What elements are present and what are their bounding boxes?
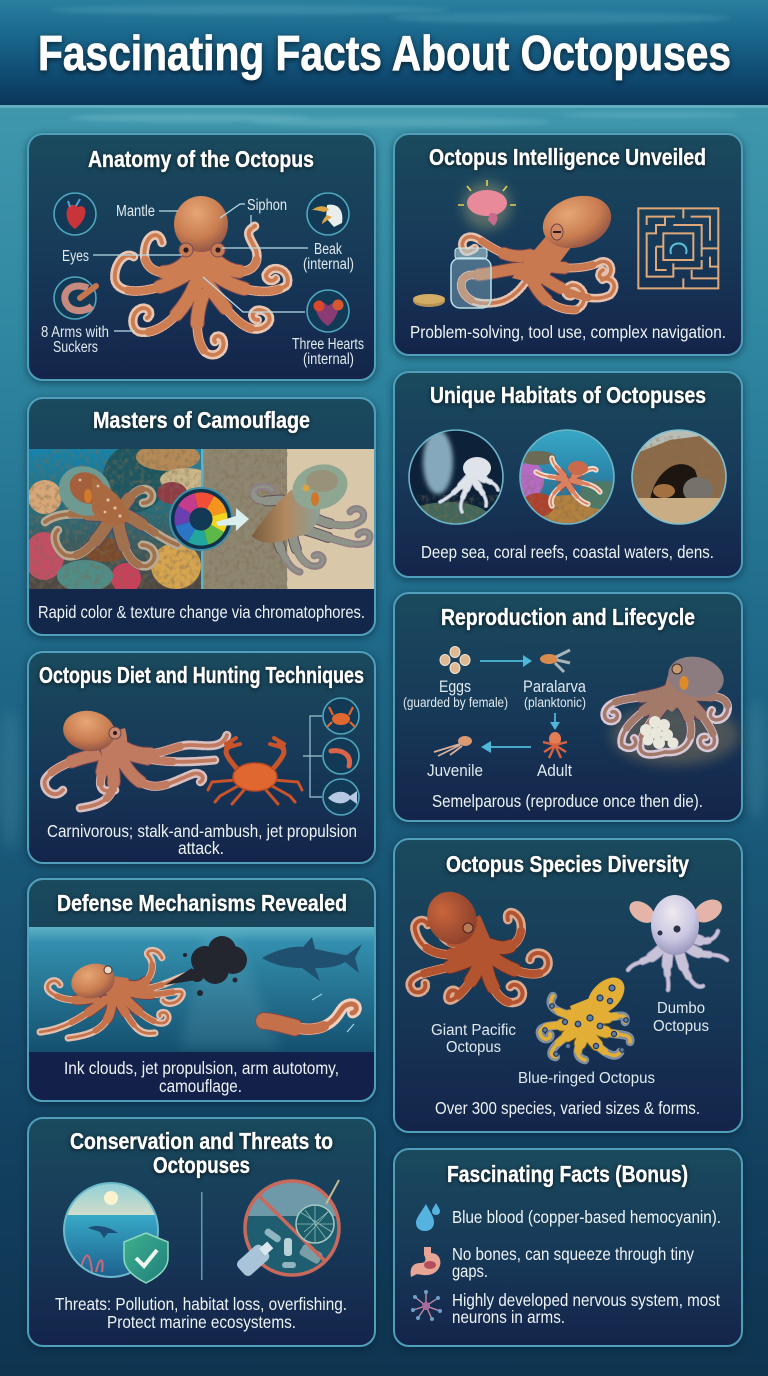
- icon: suckers: [54, 277, 96, 319]
- label: beak: [303, 241, 354, 273]
- prey bracket: [303, 716, 322, 797]
- octopus stalking illustration: [45, 707, 227, 808]
- caption: [47, 821, 357, 858]
- heading: species: Octopus Species Diversity: [446, 851, 689, 877]
- panel edge: [28, 879, 375, 1101]
- label: paralarva: (planktonic): [524, 695, 586, 710]
- icon: stomach: [411, 1247, 440, 1277]
- jar with lid: [413, 248, 491, 308]
- caption: [64, 1058, 339, 1096]
- heading: intelligence: Octopus Intelligence Unveiled: [429, 144, 706, 170]
- ink cloud: [165, 936, 247, 996]
- heading: camouflage: Masters of Camouflage: [93, 407, 310, 433]
- image: coral reef side with octopus: [29, 449, 201, 589]
- caption: Protect marine ecosystems.: [107, 1312, 296, 1332]
- illustration: giant pacific octopus: [410, 883, 548, 1003]
- label: arms: Suckers: [53, 339, 98, 356]
- underwater scene: [28, 927, 374, 1052]
- caption: [55, 1294, 347, 1332]
- panel: defense mechanisms: [28, 879, 375, 1101]
- octopus anatomy illustration: [115, 196, 288, 355]
- heading: conservation: [70, 1128, 333, 1178]
- divider: [201, 1192, 202, 1280]
- label: eggs: [403, 677, 508, 710]
- caption band: [28, 1052, 375, 1101]
- caption band: [28, 589, 375, 635]
- panel: species diversity: [394, 839, 742, 1132]
- panel: conservation and threats: [28, 1118, 375, 1346]
- caption: Ink clouds, jet propulsion, arm autotomy,: [64, 1058, 339, 1078]
- icon: three hearts: [307, 290, 349, 332]
- label: giant pacific: [431, 1022, 516, 1056]
- icon: shrimp prey: [323, 738, 359, 774]
- heading: conservation: Octopuses: [153, 1152, 250, 1178]
- image: sandy seabed side with octopus: [203, 449, 374, 589]
- maze: [638, 208, 718, 288]
- leader lines: [93, 204, 308, 331]
- fact: no bones: No bones, can squeeze through tiny: [452, 1244, 694, 1264]
- caption: Problem-solving, tool use, complex navigation.: [410, 322, 726, 342]
- fact: nervous system: neurons in arms.: [452, 1307, 565, 1327]
- icon: juvenile: [434, 736, 472, 756]
- panel: reproduction and lifecycle: [394, 593, 742, 821]
- icon: colour wheel with arrow: [170, 488, 249, 550]
- fact: nervous system: Highly developed nervous system, most: [452, 1290, 720, 1310]
- icon: water drops: [416, 1203, 440, 1231]
- icon: heart: [54, 193, 96, 235]
- image: coral reef: [519, 429, 615, 525]
- shark silhouette: [262, 937, 362, 981]
- fact: blue blood: Blue blood (copper-based hemocyanin).: [452, 1207, 721, 1227]
- label: eggs: Eggs: [439, 677, 471, 696]
- divider between the two scenes: [201, 449, 204, 589]
- icon: ocean threats: [235, 1180, 339, 1278]
- label: eggs: (guarded by female): [403, 695, 508, 710]
- heading: defense: Defense Mechanisms Revealed: [57, 890, 347, 916]
- image: coastal den: [632, 429, 728, 528]
- label: arms: 8 Arms with: [41, 324, 109, 341]
- icon: protected ocean: [62, 1182, 168, 1283]
- panel: fascinating facts bonus: [394, 1149, 742, 1346]
- label: juvenile: Juvenile: [427, 761, 483, 780]
- label: beak: (internal): [303, 256, 354, 273]
- header banner: [0, 0, 768, 108]
- label: dumbo: Octopus: [653, 1018, 709, 1035]
- caption: Semelparous (reproduce once then die).: [432, 791, 703, 811]
- label: eyes: Eyes: [62, 248, 89, 265]
- illustration: dumbo octopus: [625, 895, 727, 990]
- label: giant pacific: Giant Pacific: [431, 1022, 516, 1039]
- heading: habitats: Unique Habitats of Octopuses: [430, 382, 706, 408]
- icon: paralarva: [540, 650, 570, 672]
- caption: Deep sea, coral reefs, coastal waters, dens.: [421, 542, 714, 562]
- label: siphon: Siphon: [247, 197, 287, 214]
- caption: Rapid color & texture change via chromatophores.: [38, 602, 365, 622]
- label: adult: Adult: [537, 761, 572, 780]
- fact: no bones: [452, 1244, 694, 1281]
- label: giant pacific: Octopus: [446, 1039, 501, 1056]
- heading: bonus: Fascinating Facts (Bonus): [447, 1161, 688, 1187]
- heading: reproduction: Reproduction and Lifecycle: [441, 604, 695, 630]
- panel: diet and hunting: [28, 652, 375, 863]
- illustration: blue-ringed octopus: [540, 971, 631, 1060]
- label: beak: Beak: [314, 241, 342, 258]
- heading: conservation: Conservation and Threats to: [70, 1128, 333, 1154]
- octopus escaping illustration: [40, 950, 188, 1038]
- caption: camouflage.: [159, 1076, 242, 1096]
- arrow: paralarva to adult: [550, 713, 560, 730]
- fact: no bones: gaps.: [452, 1261, 488, 1281]
- image: deep sea vent: [408, 429, 504, 525]
- label: arms: [41, 324, 109, 356]
- heading: anatomy: Anatomy of the Octopus: [88, 146, 314, 172]
- label: hearts: Three Hearts: [292, 336, 364, 353]
- arrow: eggs to paralarva: [480, 655, 532, 667]
- icon: beak: [307, 193, 349, 235]
- panel edge: [28, 398, 375, 635]
- arrow: adult to juvenile: [481, 741, 531, 753]
- panel: intelligence: [394, 134, 742, 355]
- caption: Carnivorous; stalk-and-ambush, jet propulsion: [47, 821, 357, 841]
- octopus solving puzzle illustration: [461, 187, 618, 310]
- heading: diet: Octopus Diet and Hunting Techniques: [39, 662, 364, 688]
- icon: eggs: [440, 646, 470, 674]
- label: dumbo: Dumbo: [657, 1000, 705, 1017]
- panel: anatomy of the octopus: [28, 134, 375, 380]
- caption: attack.: [178, 838, 224, 858]
- crab illustration: [208, 738, 302, 804]
- caption: Over 300 species, varied sizes & forms.: [435, 1098, 700, 1118]
- caption: Threats: Pollution, habitat loss, overfishing.: [55, 1294, 347, 1314]
- label: paralarva: [523, 677, 586, 710]
- icon: fish prey: [323, 779, 359, 815]
- panel: masters of camouflage: [24, 398, 375, 635]
- label: hearts: [292, 336, 364, 368]
- label: hearts: (internal): [303, 351, 354, 368]
- fact: nervous system: [452, 1290, 720, 1327]
- label: blue-ringed: Blue-ringed Octopus: [518, 1070, 655, 1087]
- label: mantle: Mantle: [116, 203, 155, 220]
- octopus guarding eggs illustration: [605, 652, 739, 765]
- label: paralarva: Paralarva: [523, 677, 586, 696]
- panel: habitats: [394, 372, 742, 577]
- label: dumbo: [653, 1000, 709, 1035]
- icon: neuron: [411, 1290, 442, 1321]
- icon: crab prey: [323, 698, 359, 734]
- icon: glowing brain: [458, 180, 516, 230]
- icon: adult: [543, 732, 567, 758]
- severed arm: [264, 994, 356, 1032]
